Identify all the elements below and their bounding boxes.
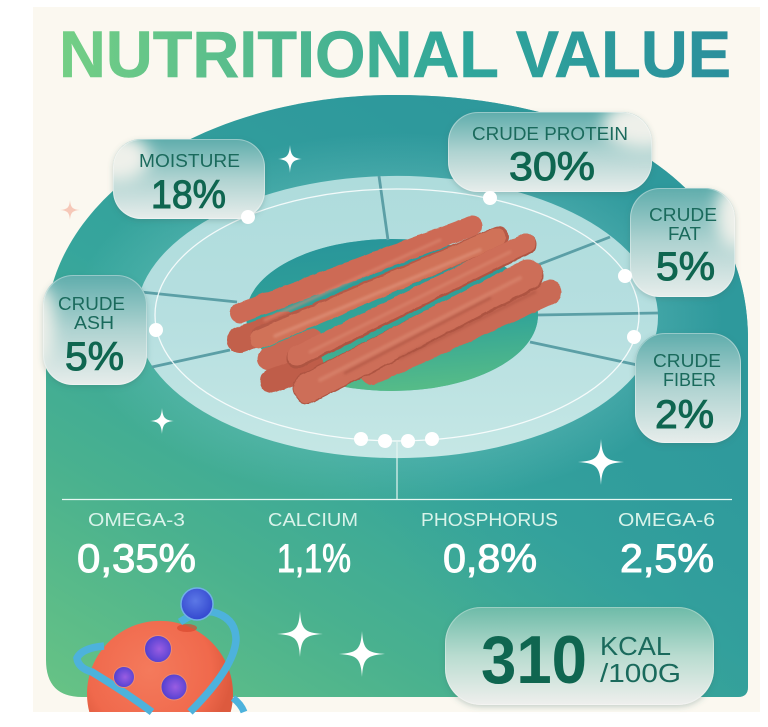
stat: phosphorus: 0,8% bbox=[443, 537, 537, 581]
card: crude fat: FAT bbox=[668, 224, 701, 244]
card: crude fiber: 2% bbox=[655, 393, 714, 437]
stat: phosphorus bbox=[421, 510, 558, 581]
stat: omega-6: OMEGA-6 bbox=[618, 510, 715, 530]
card: calories: /100G bbox=[600, 658, 681, 688]
stat: omega-6 bbox=[618, 510, 715, 581]
card: moisture: 18% bbox=[151, 173, 226, 217]
card: crude fat bbox=[628, 186, 738, 302]
card: crude protein bbox=[448, 110, 656, 198]
plate: segmented ring bbox=[136, 176, 658, 458]
card: crude fat: 5% bbox=[656, 245, 715, 289]
sparkles bbox=[150, 145, 624, 677]
card: crude protein: 30% bbox=[509, 145, 595, 189]
stat: phosphorus: PHOSPHORUS bbox=[421, 510, 558, 530]
icon: atom bbox=[77, 588, 244, 712]
stat: omega-3 bbox=[77, 510, 196, 581]
dots on ring bbox=[149, 191, 641, 448]
stat: calcium: 1,1% bbox=[277, 537, 351, 581]
card: calories bbox=[445, 607, 714, 705]
card: moisture bbox=[86, 134, 265, 219]
arch panel bbox=[46, 95, 748, 697]
stick details bbox=[265, 240, 535, 380]
card: crude ash: CRUDE bbox=[58, 294, 125, 314]
inner ring line bbox=[155, 189, 639, 441]
title: NUTRITIONAL VALUE bbox=[59, 17, 731, 91]
stat: omega-6: 2,5% bbox=[620, 537, 714, 581]
segment gaps bbox=[141, 176, 658, 367]
card: crude ash bbox=[22, 275, 147, 385]
card: crude fat: CRUDE bbox=[649, 205, 717, 225]
card: crude ash: 5% bbox=[65, 335, 124, 379]
plate ring bbox=[136, 176, 658, 458]
card: crude fiber: CRUDE bbox=[653, 351, 721, 371]
card: crude fiber: FIBER bbox=[663, 370, 716, 390]
card: calories: KCAL bbox=[600, 631, 671, 661]
card: calories: 310 bbox=[481, 622, 587, 698]
card: crude protein: CRUDE PROTEIN bbox=[472, 124, 628, 144]
plate centre hole bbox=[246, 239, 538, 391]
divider line bbox=[62, 498, 732, 500]
food sticks bbox=[240, 226, 550, 388]
sparkle: pink bbox=[60, 200, 80, 220]
stat: omega-3: OMEGA-3 bbox=[88, 510, 185, 530]
stat: omega-3: 0,35% bbox=[77, 537, 196, 581]
connector line bbox=[396, 441, 398, 499]
card: crude ash: ASH bbox=[74, 313, 114, 333]
stat: calcium: CALCIUM bbox=[268, 510, 358, 530]
stat: calcium bbox=[268, 510, 358, 581]
card: moisture: MOISTURE bbox=[139, 151, 240, 171]
card: crude fiber bbox=[635, 333, 741, 443]
